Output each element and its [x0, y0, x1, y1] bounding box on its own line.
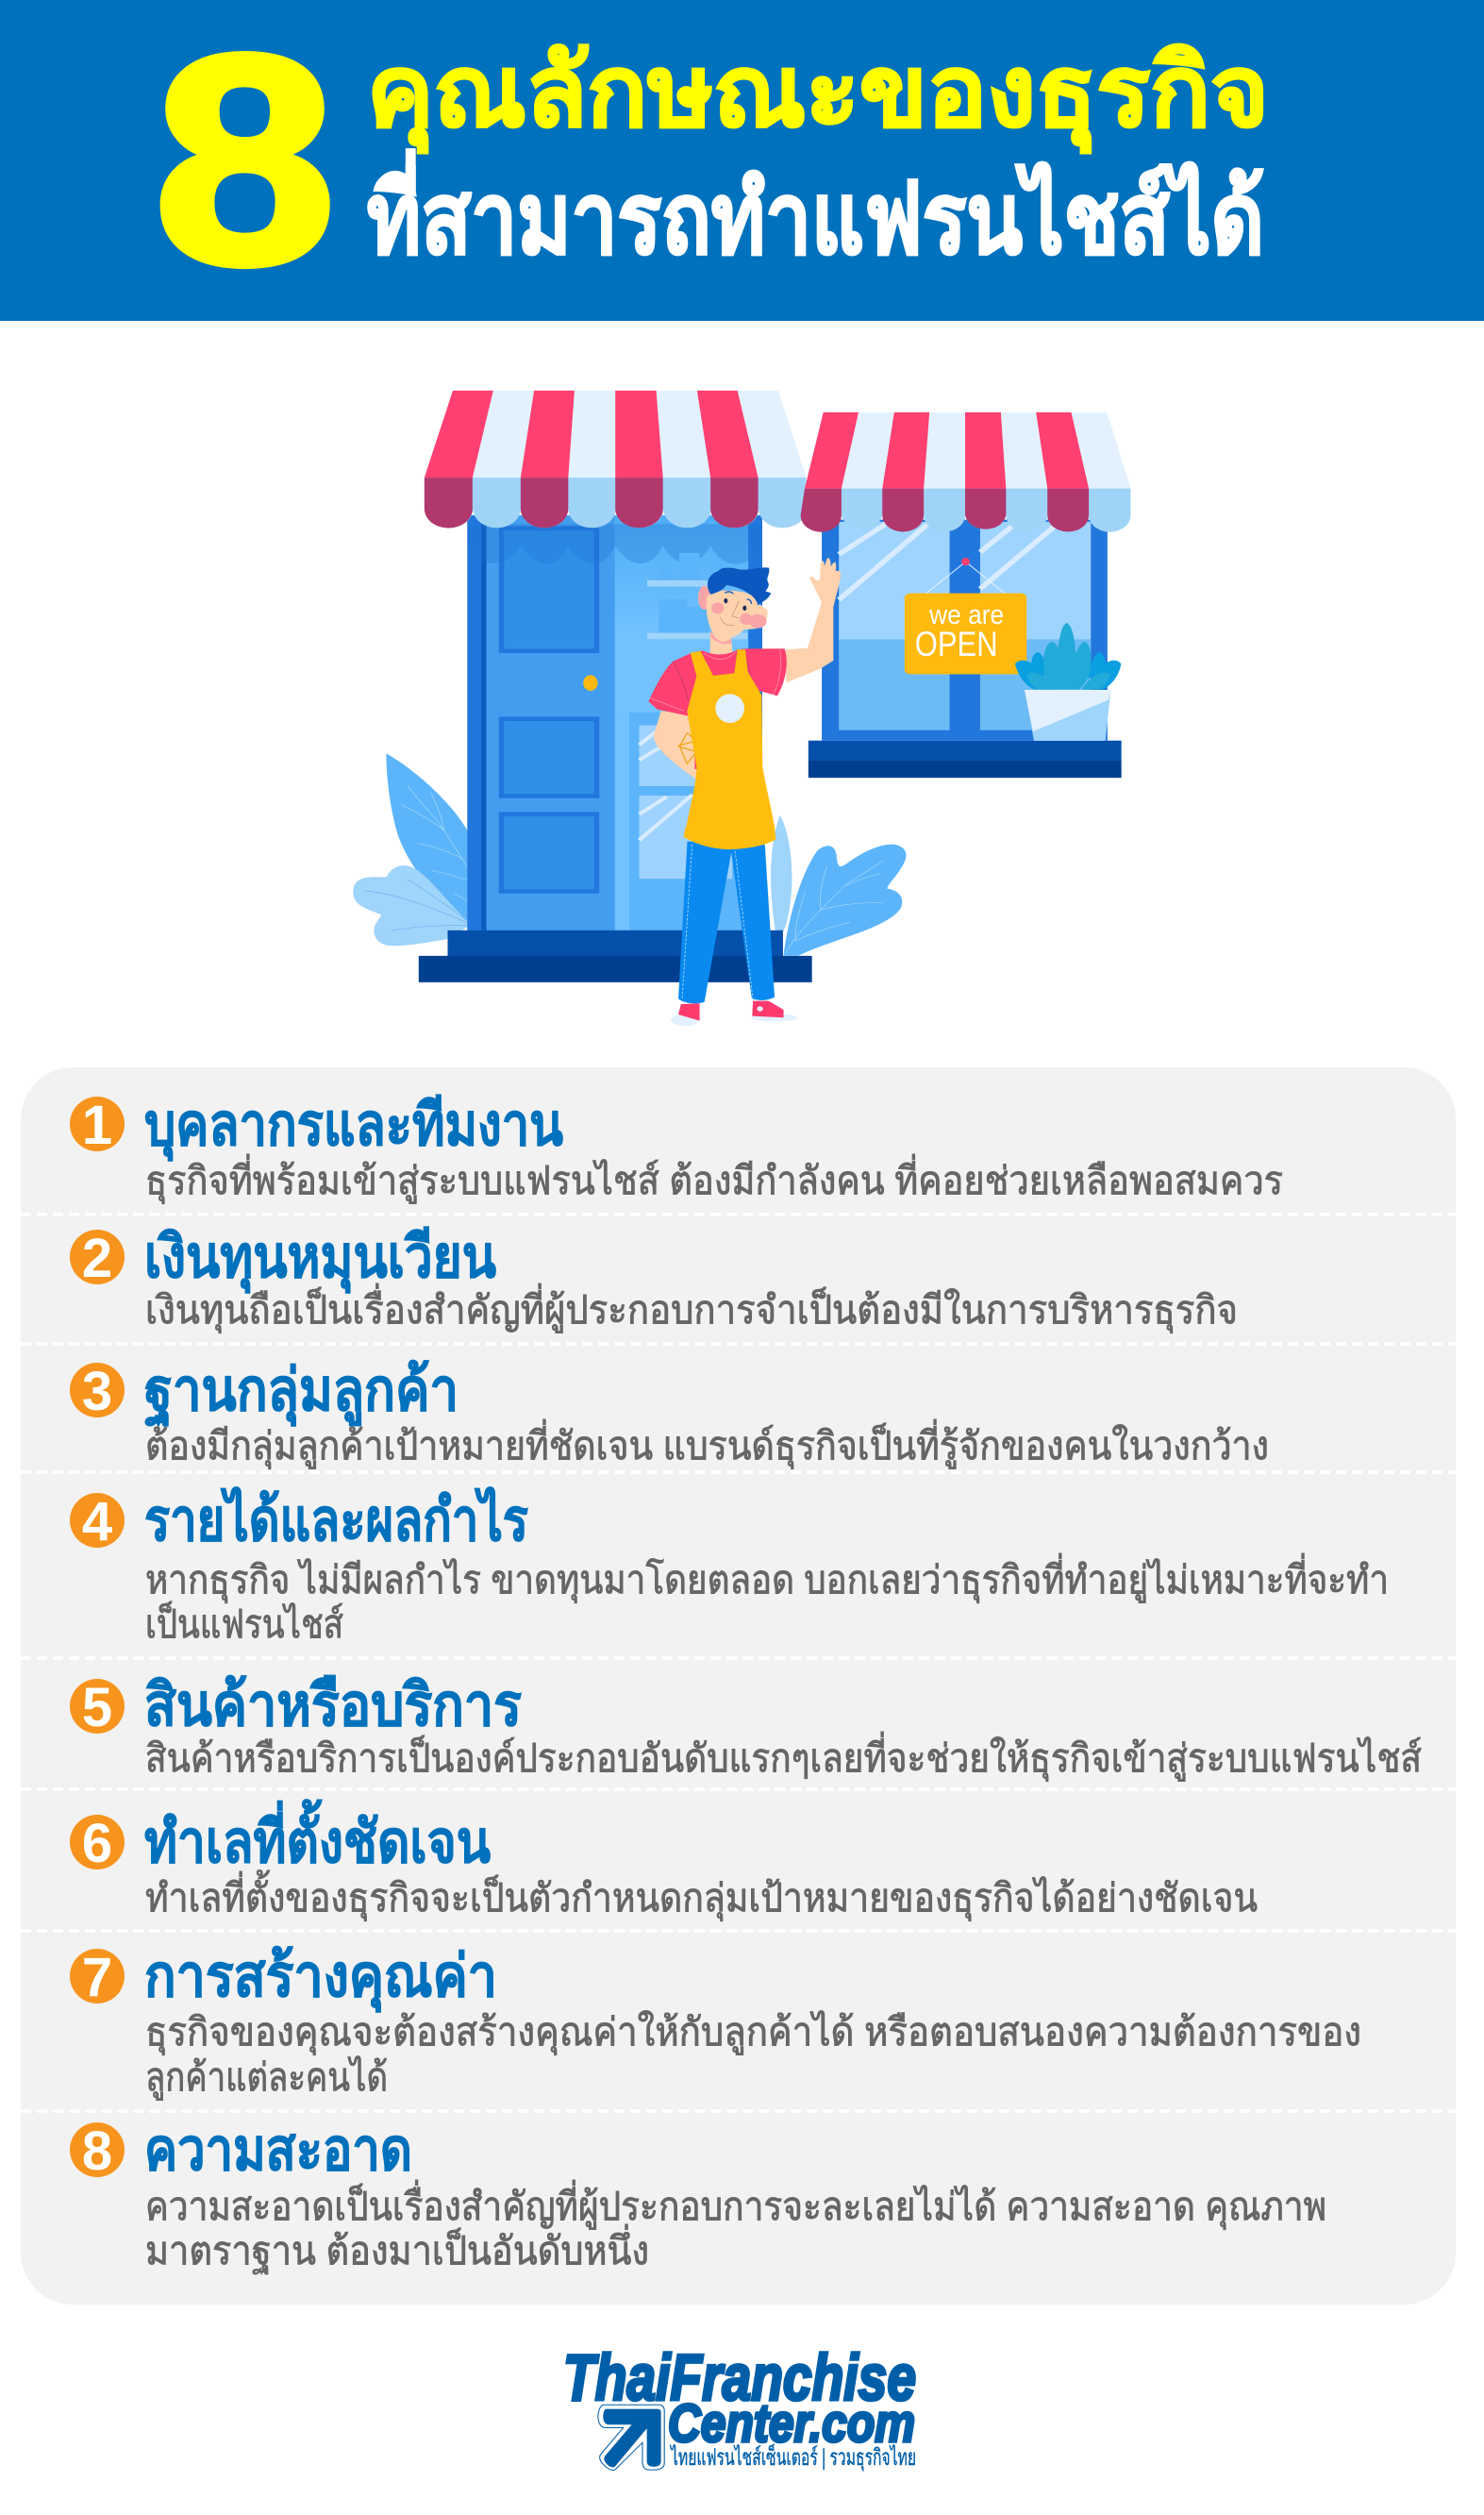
- potted plant: [1015, 623, 1121, 741]
- item 3: [70, 1358, 1269, 1469]
- door panels: [502, 528, 596, 891]
- awning: window: [801, 412, 1131, 532]
- title line 2: ที่สามารถทำแฟรนไชส์ได้: [367, 149, 1264, 275]
- hair: [708, 567, 771, 606]
- title line 1: คุณลักษณะของธุรกิจ: [367, 37, 1269, 154]
- item 4 heading: รายได้และผลกำไร: [144, 1486, 528, 1553]
- item 3 text: ต้องมีกลุ่มลูกค้าเป้าหมายที่ชัดเจน แบรนด์ธุรกิจเป็นที่รู้จักของคนในวงกว้าง: [145, 1419, 1269, 1469]
- open sign: OPEN: [915, 625, 998, 663]
- item 7 text: [145, 2010, 1361, 2101]
- shop shelves: [647, 553, 747, 639]
- item 7 heading: การสร้างคุณค่า: [144, 1944, 497, 2012]
- badge 8: [70, 2121, 125, 2182]
- item 1: [70, 1093, 1283, 1204]
- illustration: shop and shopkeeper: [353, 391, 1131, 1026]
- left leaf small: [353, 865, 468, 946]
- badge 4: 4: [82, 1491, 112, 1552]
- raised arm and hand: [786, 558, 841, 682]
- badge 6: [70, 1813, 125, 1874]
- badge 1: [70, 1095, 125, 1156]
- glove: [677, 733, 696, 763]
- apron hem: [684, 828, 776, 849]
- item 8: [70, 2118, 1326, 2274]
- plant pot: [1025, 690, 1110, 741]
- item 2 text: เงินทุนถือเป็นเรื่องสำคัญที่ผู้ประกอบการจำเป็นต้องมีในการบริหารธุรกิจ: [145, 1283, 1238, 1333]
- item 8 text: [145, 2180, 1326, 2274]
- item 7 text: ลูกค้าแต่ละคนได้: [145, 2055, 388, 2101]
- shirt: [648, 648, 787, 715]
- shop structure: [419, 391, 1131, 982]
- item 6: [70, 1799, 1258, 1921]
- head: [698, 586, 768, 638]
- big number 8: 8: [154, 0, 336, 326]
- door knob: [583, 675, 598, 691]
- apron badge: [715, 694, 744, 723]
- badge 2: 2: [82, 1228, 112, 1289]
- door step: [419, 931, 812, 982]
- item 2 heading: เงินทุนหมุนเวียน: [144, 1225, 496, 1293]
- right leaf: [784, 845, 906, 956]
- item 1 heading: บุคลากรและทีมงาน: [144, 1093, 563, 1161]
- item 4 text: [145, 1553, 1389, 1646]
- item 6 text: ทำเลที่ตั้งของธุรกิจจะเป็นตัวกำหนดกลุ่มเป้าหมายของธุรกิจได้อย่างชัดเจน: [145, 1869, 1258, 1921]
- logo: ThaiFranchiseCenter.com: [563, 2341, 916, 2472]
- shoes: [671, 1001, 797, 1026]
- item 8 text: มาตราฐาน ต้องมาเป็นอันดับหนึ่ง: [145, 2224, 649, 2274]
- item 8 text: ความสะอาดเป็นเรื่องสำคัญที่ผู้ประกอบการจะละเลยไม่ได้ ความสะอาด คุณภาพ: [145, 2180, 1326, 2230]
- item 4 text: เป็นแฟรนไชส์: [145, 1601, 343, 1646]
- item 4: [70, 1486, 1389, 1646]
- badge 5: [70, 1677, 125, 1738]
- badge 7: 7: [82, 1947, 112, 2008]
- neck: [710, 630, 733, 654]
- door storefront: [467, 515, 762, 931]
- item 7 text: ธุรกิจของคุณจะต้องสร้างคุณค่าให้กับลูกค้าได้ หรือตอบสนองความต้องการของ: [145, 2010, 1361, 2055]
- item 1 text: ธุรกิจที่พร้อมเข้าสู่ระบบแฟรนไชส์ ต้องมีกำลังคน ที่คอยช่วยเหลือพอสมควร: [145, 1154, 1283, 1204]
- awning: main shop: [425, 391, 807, 528]
- shopkeeper upper body: [648, 558, 841, 830]
- item 2: [70, 1225, 1238, 1333]
- apron: [686, 649, 775, 830]
- item 8 heading: ความสะอาด: [144, 2118, 412, 2183]
- header banner: [0, 0, 1484, 326]
- badge 3: [70, 1361, 125, 1422]
- shopkeeper legs: [671, 828, 797, 1026]
- badge 2: [70, 1228, 125, 1289]
- badge 8: 8: [82, 2121, 112, 2182]
- badge 3: 3: [82, 1361, 112, 1422]
- badge 1: 1: [82, 1095, 112, 1156]
- logo arrow: [598, 2405, 664, 2471]
- left leaf large: [386, 753, 468, 922]
- badge 5: 5: [82, 1677, 112, 1738]
- right narrow leaf: [771, 815, 792, 931]
- open sign: [905, 558, 1026, 675]
- badge 4: [70, 1491, 125, 1552]
- open sign: we are: [928, 599, 1004, 629]
- window storefront: [809, 520, 1122, 778]
- logo tagline: ไทยแฟรนไชส์เซ็นเตอร์ | รวมธุรกิจไทย: [670, 2443, 916, 2472]
- logo wordmark: ThaiFranchise: [563, 2341, 916, 2414]
- item 5: [70, 1673, 1422, 1782]
- shop glass panes: [629, 713, 748, 931]
- trousers: [678, 842, 775, 1003]
- item 5 heading: สินค้าหรือบริการ: [144, 1673, 522, 1738]
- badge 6: 6: [82, 1813, 112, 1874]
- badge 7: [70, 1947, 125, 2008]
- item 3 heading: ฐานกลุ่มลูกค้า: [144, 1358, 459, 1428]
- plant leaves: [1015, 623, 1121, 690]
- item 7: [70, 1944, 1361, 2101]
- panel: eight qualities: [21, 1067, 1456, 2305]
- item 6 heading: ทำเลที่ตั้งชัดเจน: [144, 1799, 491, 1875]
- logo domain: Center.com: [668, 2393, 915, 2454]
- back arm: [654, 711, 700, 780]
- plants behind the shop: [353, 753, 906, 956]
